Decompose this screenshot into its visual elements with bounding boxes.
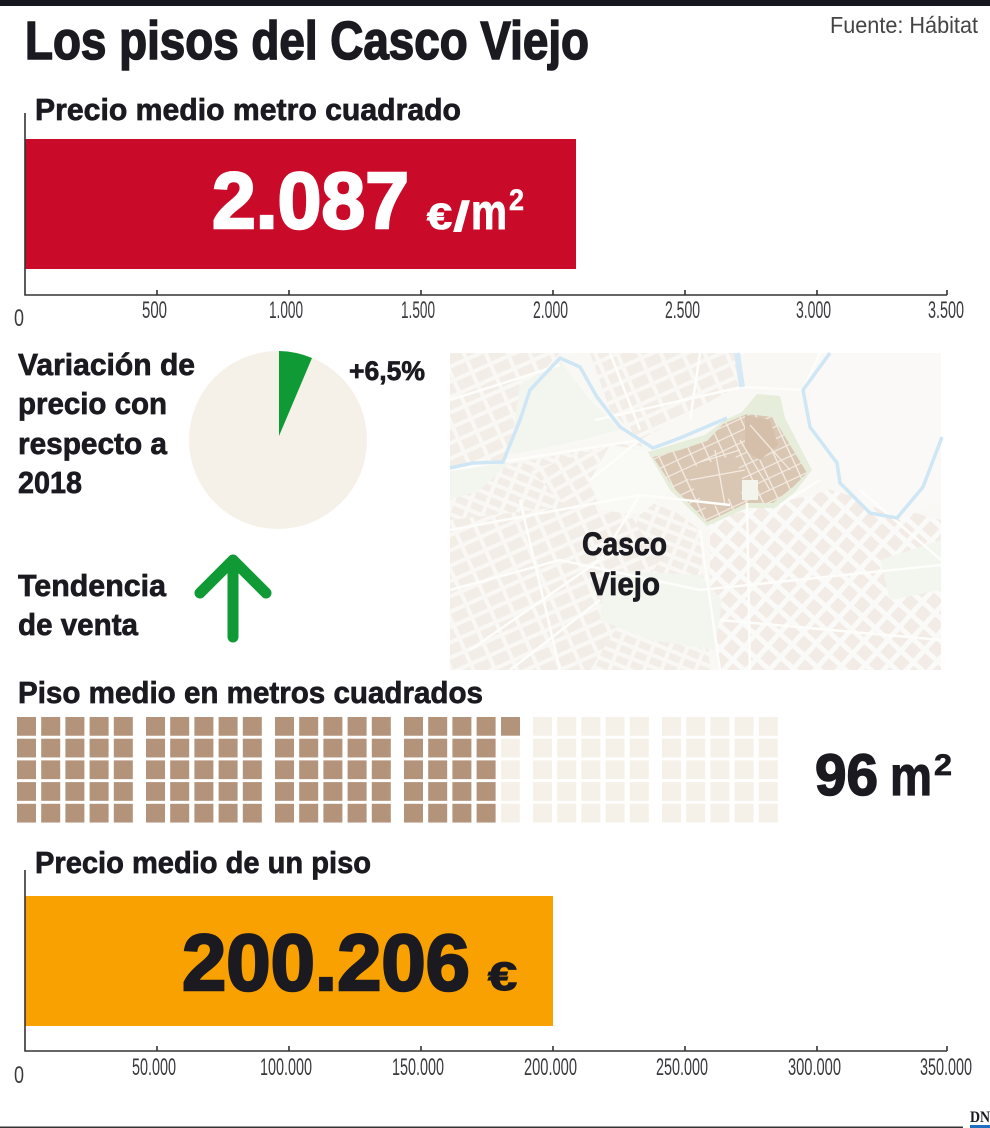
axis labels: 50.000 (132, 1054, 176, 1081)
text: variacion de precio (18, 347, 195, 500)
unit: euro: € (488, 955, 517, 999)
axis labels: 250.000 (656, 1054, 708, 1081)
text: variacion de precio: respecto a (18, 426, 168, 461)
bar: 200.206 (25, 896, 553, 1026)
title: Los pisos del Casco Viejo (25, 11, 589, 71)
old town (653, 414, 807, 522)
axis labels: 1.500 (401, 297, 435, 324)
unit: euros per square metre: € (427, 196, 452, 237)
map label: Viejo (590, 566, 660, 602)
unit: euros per square metre: 2 (509, 184, 524, 217)
axis labels: 200.000 (524, 1054, 577, 1081)
axis labels: 0 (14, 1062, 24, 1089)
text: variacion de precio: precio con (18, 386, 167, 421)
panel: precio medio de un piso (14, 845, 972, 1089)
text: variacion de precio: 2018 (18, 465, 82, 500)
footer line (0, 1126, 963, 1128)
axis (25, 113, 947, 295)
axis labels: 1.000 (269, 297, 303, 324)
text: tendencia de venta: de venta (18, 607, 139, 642)
map block textures (450, 353, 560, 470)
value: 200.206: 200.206 (182, 918, 470, 1007)
panel: piso medio en metros cuadrados (17, 675, 952, 823)
old town green belt (648, 394, 812, 526)
park areas (600, 570, 722, 650)
heading: piso medio: Piso medio en metros cuadrados (18, 675, 483, 710)
bar: 2.087 (25, 139, 576, 269)
map: Casco Viejo (450, 353, 942, 670)
axis labels (14, 297, 964, 332)
axis labels: 3.500 (928, 297, 964, 324)
map label: Casco (582, 526, 667, 562)
value: 96 m2 (815, 743, 952, 808)
axis labels: 0 (14, 305, 24, 332)
axis labels (14, 1054, 972, 1089)
axis labels: 100.000 (260, 1054, 312, 1081)
value: 96 m2: 96 (815, 743, 878, 808)
axis labels: 2.500 (665, 297, 700, 324)
value: 2.087: 2.087 (212, 156, 409, 245)
value: 96 m2: 2 (934, 749, 952, 782)
rivers (450, 358, 727, 468)
text: tendencia de venta (18, 568, 167, 642)
text: variacion de precio: Variación de (18, 347, 195, 382)
panel: precio medio metro cuadrado (14, 92, 964, 332)
roads (450, 353, 941, 670)
icon: green up arrow (200, 560, 266, 637)
pie chart (189, 351, 367, 529)
pie value: +6,5% (349, 356, 425, 386)
text: tendencia de venta: Tendencia (18, 568, 167, 603)
axis labels: 300.000 (788, 1054, 841, 1081)
top bar (0, 0, 990, 6)
unit: euros per square metre (427, 184, 524, 240)
heading: precio metro cuadrado: Precio medio metro cuadrado (35, 92, 461, 127)
heading: precio de un piso: Precio medio de un piso (35, 845, 371, 880)
unit: euros per square metre: m (471, 184, 507, 240)
axis labels: 2.000 (533, 297, 568, 324)
axis labels: 3.000 (796, 297, 831, 324)
unit: euros per square metre: / (453, 193, 470, 240)
waffle chart: 96 of 120 squares (17, 717, 779, 823)
axis labels: 150.000 (392, 1054, 444, 1081)
source: Fuente: Hábitat (830, 12, 979, 38)
value: 96 m2: m (890, 744, 932, 807)
axis labels: 500 (142, 297, 167, 324)
axis (25, 870, 947, 1051)
map label (582, 526, 667, 602)
